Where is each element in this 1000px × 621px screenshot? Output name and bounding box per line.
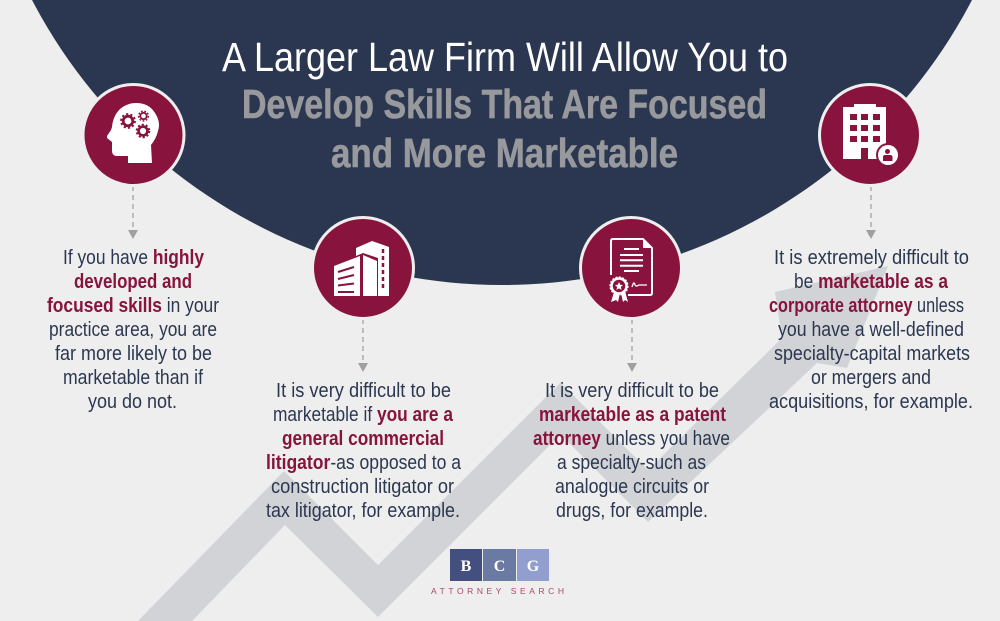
text: step 4: specialty-capital markets bbox=[774, 343, 970, 365]
text: step 1: you do not. bbox=[88, 391, 177, 413]
text: step 3 bbox=[533, 380, 730, 522]
text: step 4: or mergers and bbox=[811, 367, 931, 389]
logo: BCG Attorney Search: B bbox=[461, 558, 472, 575]
text: step 1: developed and bbox=[74, 271, 192, 293]
title: and More Marketable bbox=[331, 130, 678, 176]
text: step 3: It is very difficult to be bbox=[545, 380, 719, 402]
text: step 3: analogue circuits or bbox=[555, 476, 709, 498]
text: step 1: marketable than if bbox=[63, 367, 203, 389]
title: A Larger Law Firm Will Allow You to bbox=[222, 34, 788, 80]
text: step 4: be marketable as a bbox=[794, 271, 949, 293]
text: step 1 bbox=[47, 247, 219, 413]
text: step 4 bbox=[769, 247, 973, 413]
logo: BCG Attorney Search: ATTORNEY SEARCH bbox=[431, 586, 564, 596]
text: step 2: litigator-as opposed to a bbox=[266, 452, 462, 474]
logo: BCG Attorney Search: G bbox=[527, 558, 540, 575]
text: step 4: It is extremely difficult to bbox=[774, 247, 969, 269]
title: Develop Skills That Are Focused bbox=[242, 81, 767, 127]
text: step 4: corporate attorney unless bbox=[769, 295, 964, 317]
text: step 1: far more likely to be bbox=[55, 343, 212, 365]
logo: BCG Attorney Search bbox=[431, 549, 564, 596]
text: step 1: If you have highly bbox=[63, 247, 205, 269]
text: step 2: It is very difficult to be bbox=[276, 380, 451, 402]
step 2 connector arrow bbox=[358, 319, 368, 372]
text: step 2: tax litigator, for example. bbox=[266, 500, 460, 522]
icon: head with gears bbox=[83, 84, 184, 186]
text: step 4: acquisitions, for example. bbox=[769, 391, 973, 413]
dark semicircle header bbox=[0, 0, 1000, 285]
icon: office buildings bbox=[312, 218, 414, 318]
logo: BCG Attorney Search: C bbox=[494, 558, 505, 575]
step 4 connector arrow bbox=[866, 186, 876, 239]
text: step 1: practice area, you are bbox=[49, 319, 217, 341]
text: step 3: attorney unless you have bbox=[533, 428, 730, 450]
text: step 3: a specialty-such as bbox=[557, 452, 706, 474]
text: step 4: you have a well-defined bbox=[778, 319, 964, 341]
text: step 3: marketable as a patent bbox=[539, 404, 726, 426]
step 1 connector arrow bbox=[128, 186, 138, 239]
icon: certificate document bbox=[580, 218, 682, 318]
icon: corporate building with person badge bbox=[820, 84, 920, 186]
arrow: rising zigzag trend bbox=[138, 266, 888, 621]
text: step 2 bbox=[266, 380, 462, 522]
text: step 2: general commercial bbox=[282, 428, 444, 450]
title bbox=[222, 34, 788, 176]
step 3 connector arrow bbox=[627, 319, 637, 372]
text: step 1: focused skills in your bbox=[47, 295, 219, 317]
text: step 3: drugs, for example. bbox=[556, 500, 708, 522]
text: step 2: construction litigator or bbox=[271, 476, 454, 498]
text: step 2: marketable if you are a bbox=[273, 404, 454, 426]
